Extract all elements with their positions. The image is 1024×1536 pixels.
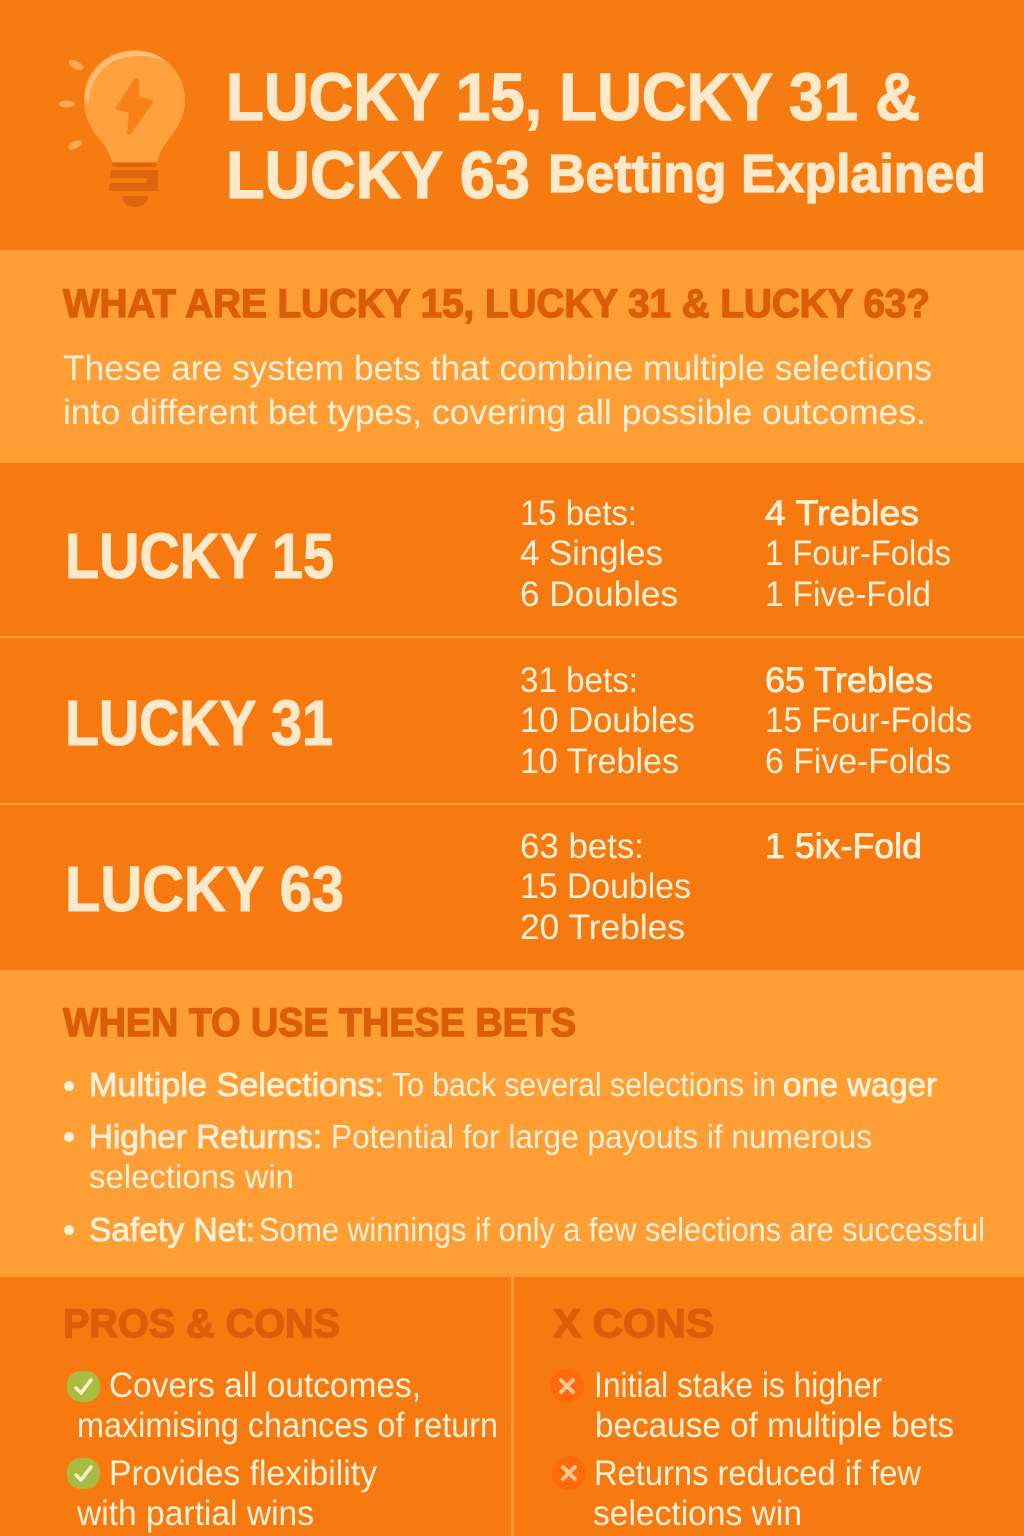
pro item: covers all outcomes: Covers all outcomes, <box>109 1366 421 1405</box>
panel: when to use <box>0 970 1024 1277</box>
con item: returns reduced <box>552 1454 922 1533</box>
bullet: higher returns: Potential for large payouts if numerous <box>331 1118 872 1155</box>
list: lucky 63 first column <box>520 827 691 947</box>
text block: definition <box>63 349 932 432</box>
pro item: provides flexibility: with partial wins <box>76 1494 314 1533</box>
pro item: provides flexibility: Provides flexibility <box>109 1454 377 1493</box>
list: lucky 15 second column: 1 Five-Fold <box>765 575 931 614</box>
list: lucky 15 second column: 1 Four-Folds <box>765 534 951 573</box>
con item: initial stake <box>550 1366 954 1445</box>
bullet: multiple selections <box>64 1066 937 1103</box>
label: lucky 31: LUCKY 31 <box>65 687 333 759</box>
panel: what are these bets <box>0 250 1024 463</box>
title: Betting Explained <box>548 144 986 204</box>
bullet: higher returns: selections win <box>89 1158 294 1195</box>
title <box>226 60 986 213</box>
panel: pros <box>0 1277 511 1536</box>
list: lucky 63 first column: 63 bets: <box>520 827 644 866</box>
bullet: multiple selections: one wager <box>783 1066 937 1103</box>
title: LUCKY 63 <box>226 138 530 213</box>
bullet: higher returns: Higher Returns: <box>89 1118 322 1155</box>
heading: cons: X CONS <box>553 1302 714 1346</box>
title: LUCKY 15, LUCKY 31 & <box>226 60 920 135</box>
icon: cross badge <box>550 1369 584 1403</box>
con item: initial stake: because of multiple bets <box>595 1406 954 1445</box>
list: lucky 31 first column: 31 bets: <box>520 661 638 700</box>
list: lucky 15 first column <box>520 494 678 614</box>
panel: lucky 31 <box>0 638 1024 803</box>
con item: initial stake: Initial stake is higher <box>594 1366 882 1405</box>
list: lucky 31 second column: 65 Trebles <box>765 661 933 700</box>
bullet: safety net: Safety Net: <box>89 1211 255 1248</box>
text block: definition: These are system bets that combine multiple selections <box>63 349 932 388</box>
bullet: multiple selections: Multiple Selections: <box>89 1066 384 1103</box>
pro item: provides flexibility <box>67 1454 377 1533</box>
bullet: higher returns <box>64 1118 872 1195</box>
icon: light bulb <box>59 50 185 207</box>
bullet: safety net: Some winnings if only a few selections are successful <box>259 1211 985 1248</box>
list: lucky 15 second column <box>765 494 951 614</box>
heading: what are: WHAT ARE LUCKY 15, LUCKY 31 & LUCKY 63? <box>63 282 930 326</box>
list: lucky 31 second column: 15 Four-Folds <box>765 701 972 740</box>
heading: pros and cons: PROS & CONS <box>63 1302 340 1346</box>
list: lucky 31 first column: 10 Doubles <box>520 701 695 740</box>
list: lucky 31 first column: 10 Trebles <box>520 742 679 781</box>
icon: cross badge <box>552 1456 586 1490</box>
icon: check badge <box>67 1371 100 1402</box>
list: lucky 63 first column: 20 Trebles <box>520 908 685 947</box>
list: lucky 15 second column: 4 Trebles <box>765 494 919 533</box>
pro item: covers all outcomes: maximising chances of return <box>77 1406 498 1445</box>
text block: definition: into different bet types, covering all possible outcomes. <box>63 393 926 432</box>
label: lucky 63: LUCKY 63 <box>65 853 344 925</box>
list: lucky 63 first column: 15 Doubles <box>520 867 691 906</box>
con item: returns reduced: Returns reduced if few <box>594 1454 922 1493</box>
list: lucky 15 first column: 15 bets: <box>520 494 637 533</box>
list: lucky 31 second column <box>765 661 972 781</box>
list: lucky 63 second column: 1 5ix-Fold <box>765 827 922 866</box>
panel: cons <box>514 1277 1024 1536</box>
list: lucky 31 first column <box>520 661 695 781</box>
panel: header <box>0 0 1024 250</box>
label: lucky 15: LUCKY 15 <box>65 520 334 592</box>
bullet: multiple selections: To back several selections in <box>392 1066 776 1103</box>
list: lucky 31 second column: 6 Five-Folds <box>765 742 951 781</box>
list: lucky 15 first column: 4 Singles <box>520 534 663 573</box>
pro item: covers all outcomes <box>67 1366 498 1445</box>
panel: lucky 15 <box>0 463 1024 636</box>
heading: when to use: WHEN TO USE THESE BETS <box>63 1001 576 1045</box>
list: lucky 15 first column: 6 Doubles <box>520 575 678 614</box>
con item: returns reduced: selections win <box>593 1494 802 1533</box>
icon: check badge <box>67 1458 100 1489</box>
panel: lucky 63 <box>0 805 1024 970</box>
